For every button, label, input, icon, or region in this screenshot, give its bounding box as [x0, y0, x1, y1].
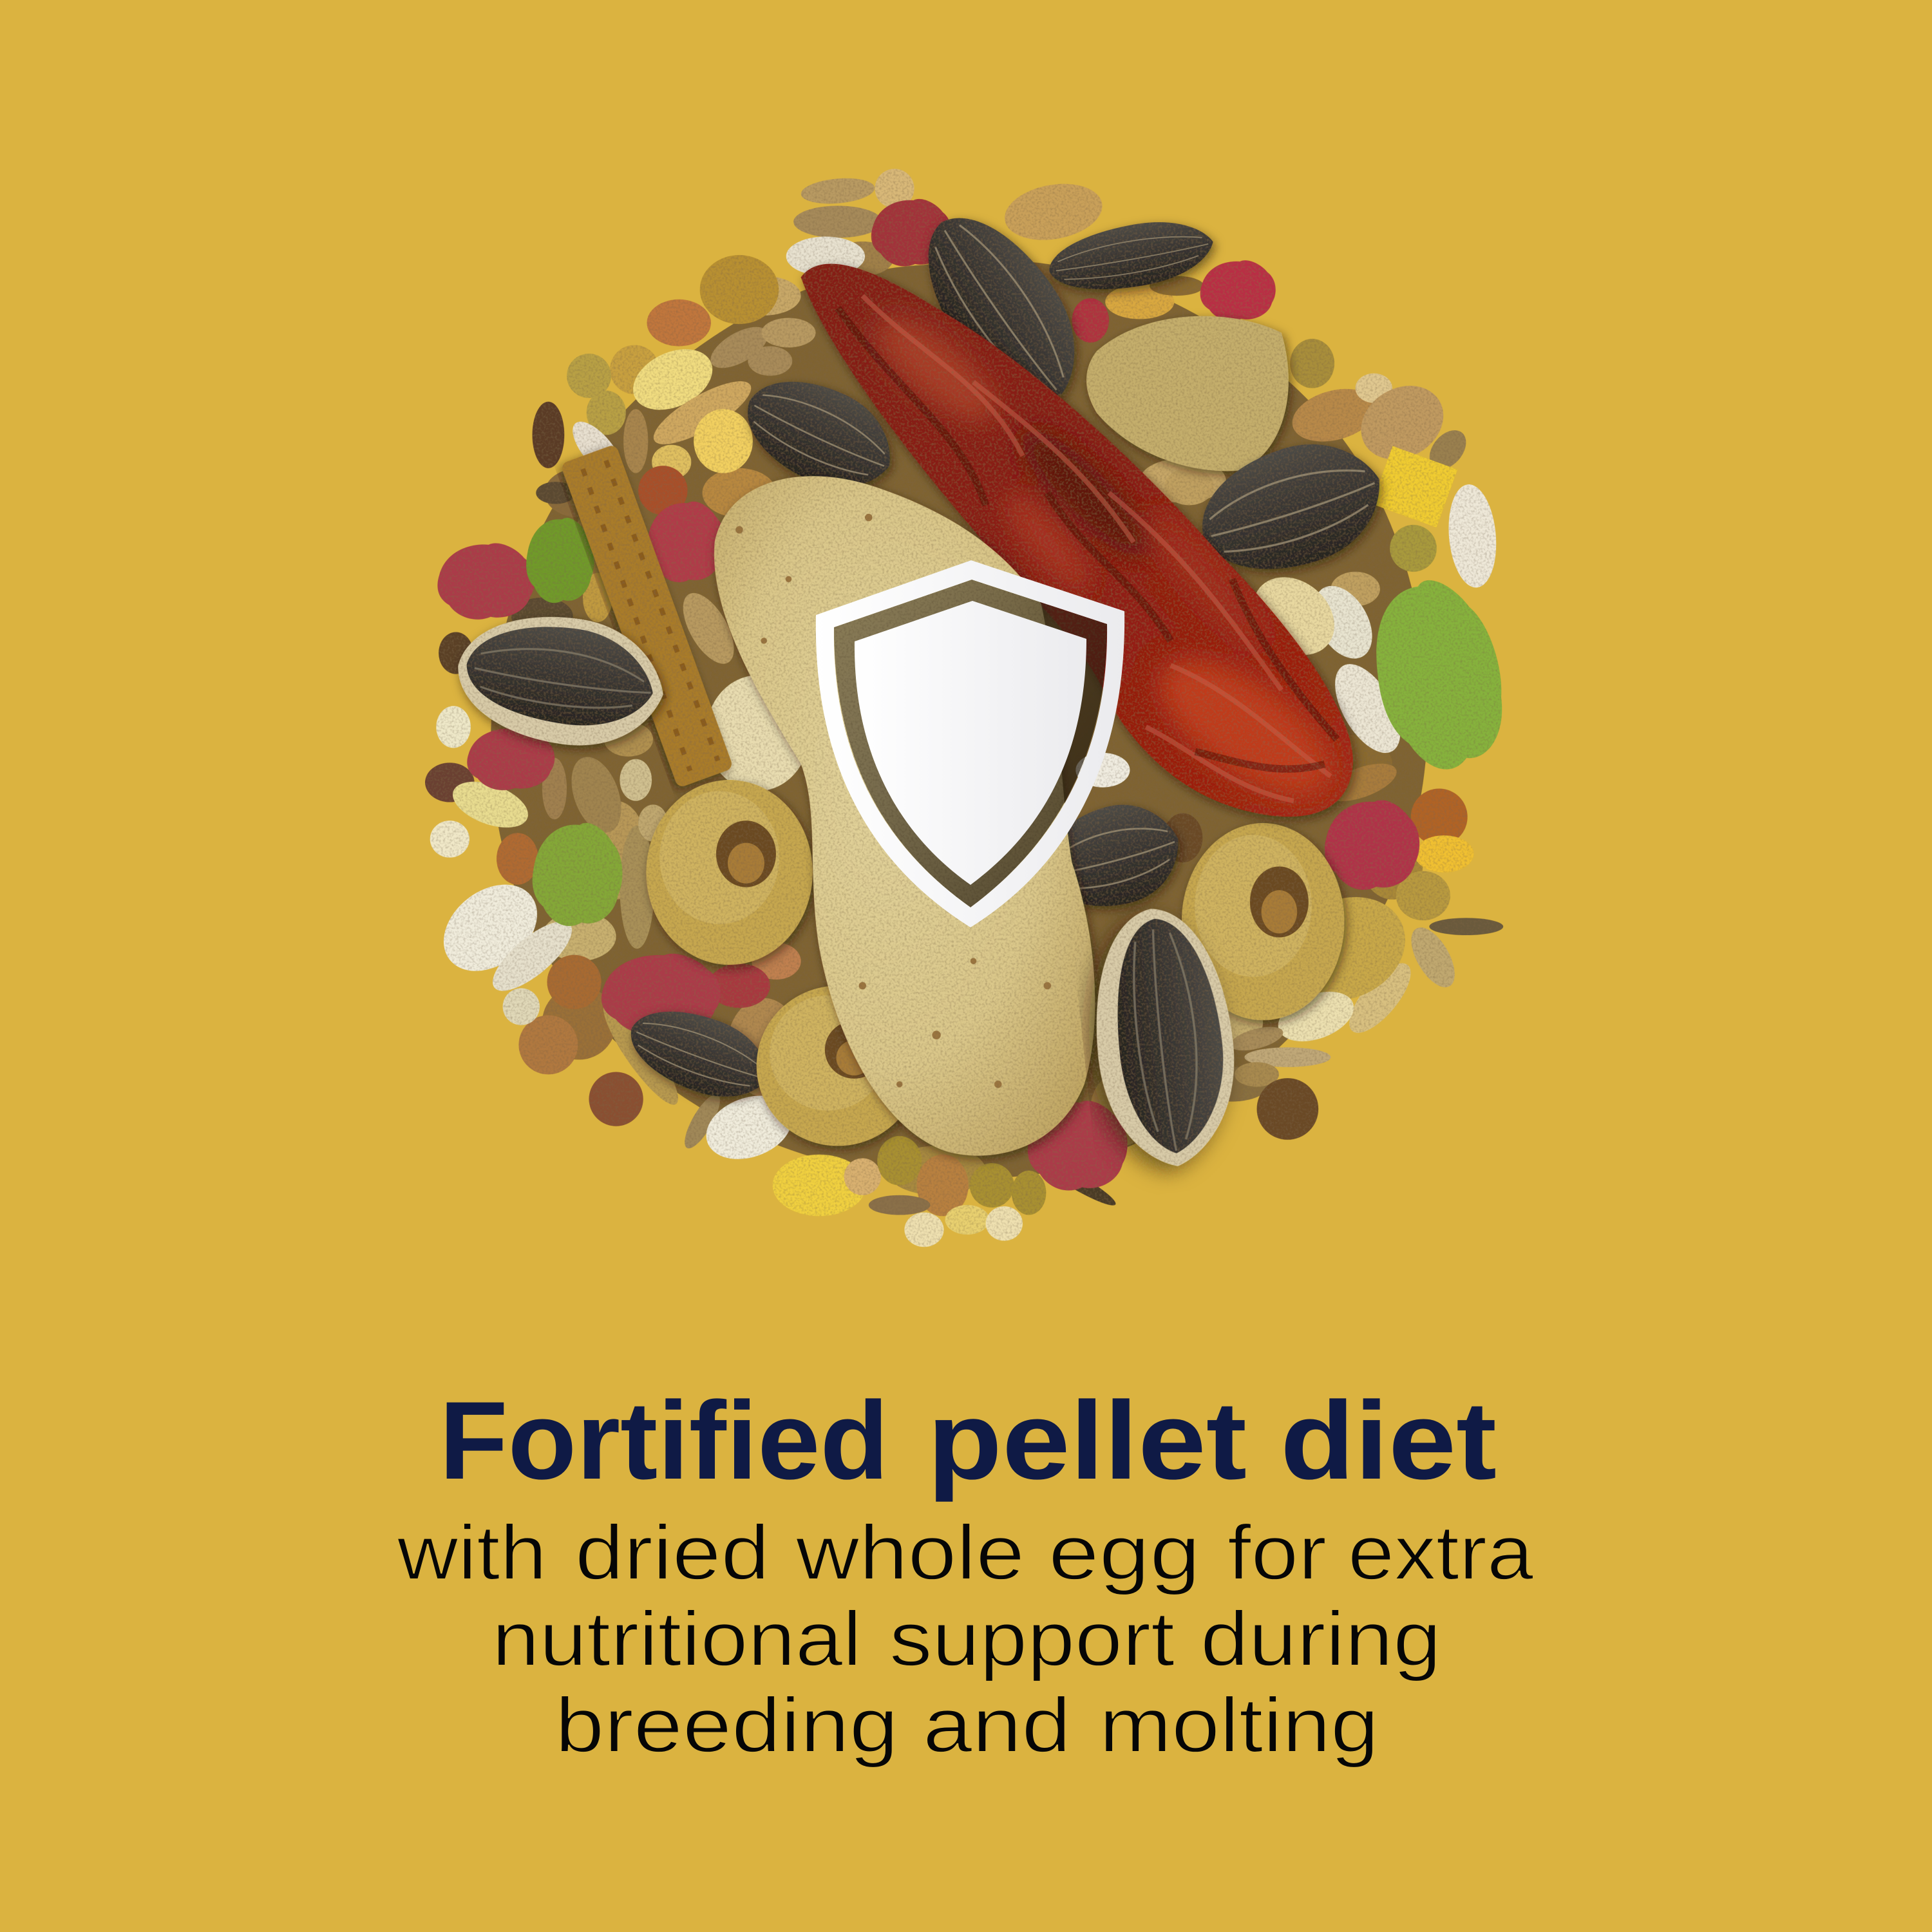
large peanut shell	[714, 476, 1095, 1156]
green pellets	[526, 518, 1521, 926]
body line 3: molting	[1099, 1682, 1379, 1768]
heading: pellet	[927, 1379, 1247, 1502]
large striped sunflower seed	[1083, 902, 1245, 1173]
shield inner plate	[855, 601, 1086, 885]
dried red chili	[801, 264, 1353, 820]
body text	[397, 1510, 1533, 1768]
gap-filling grains	[511, 242, 1423, 1195]
body line 1: whole	[795, 1510, 1025, 1596]
crumbly tan pellet	[1086, 316, 1289, 471]
shield gap: dark translucent band	[834, 580, 1107, 907]
infographic canvas	[398, 169, 1533, 1767]
heading: Fortified	[439, 1379, 889, 1502]
cereal rings	[647, 780, 1344, 1146]
body line 2: during	[1200, 1596, 1441, 1682]
shield outer ring	[816, 560, 1124, 927]
shield icon	[816, 560, 1124, 927]
body line 2: support	[889, 1596, 1175, 1682]
sunflower seeds	[450, 191, 1397, 1113]
baked pellet stick	[560, 444, 734, 788]
small seeds and grains	[425, 169, 1503, 1247]
heading: diet	[1280, 1379, 1497, 1502]
body line 1: egg	[1048, 1510, 1200, 1596]
food mix: round pile of seeds, pellets, peanut and chili	[425, 169, 1521, 1247]
body line 1: with	[397, 1510, 547, 1596]
body line 3: breeding	[555, 1682, 898, 1768]
body line 1: dried	[575, 1510, 770, 1596]
body line 2: nutritional	[492, 1596, 862, 1682]
body line 1: extra	[1348, 1510, 1533, 1596]
pile base	[491, 260, 1428, 1179]
red fruit pellets	[437, 199, 1419, 1190]
body line 3: and	[923, 1682, 1071, 1768]
body line 1: for	[1227, 1510, 1327, 1596]
